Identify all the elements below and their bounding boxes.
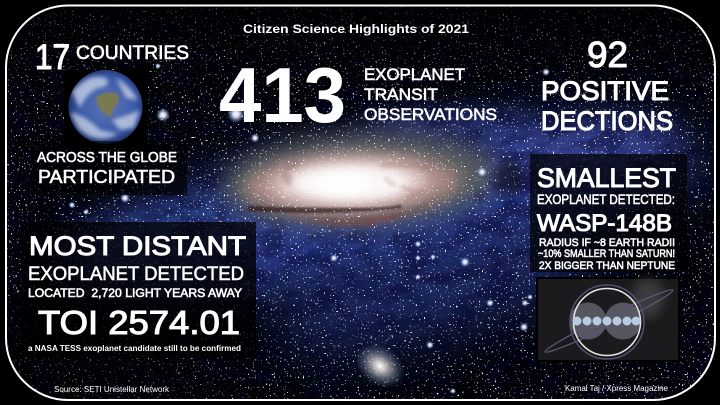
text block: size comparisons: ~10% SMALLER THAN SATURN! (538, 248, 675, 260)
name: TOI 2574.01: TOI 2574.01 (38, 304, 240, 341)
label: exoplanet transit observations: OBSERVATIONS (364, 105, 497, 124)
icon: planet size comparison with ring (536, 277, 680, 362)
panel: 413 observations (219, 51, 497, 139)
stat: 92: 92 (587, 34, 628, 75)
dust lane (248, 204, 402, 213)
subheading: exoplanet detected: EXOPLANET DETECTED (28, 263, 244, 285)
text block: size comparisons (538, 237, 675, 272)
author credit: Kamal Taj / Xpress Magazine (565, 384, 669, 393)
label: positive dections: DECTIONS (541, 106, 673, 136)
panel: smallest exoplanet (530, 154, 687, 362)
heading: smallest: SMALLEST (537, 163, 676, 193)
text block: size comparisons: 2X BIGGER THAN NEPTUNE (539, 260, 675, 272)
subheading: exoplanet detected: EXOPLANET DETECTED: (537, 191, 675, 207)
note: candidate status: a NASA TESS exoplanet candidate still to be confirmed (28, 344, 241, 353)
label: exoplanet transit observations: EXOPLANET (364, 65, 465, 84)
label: exoplanet transit observations: TRANSIT (364, 85, 438, 104)
panel: 92 positive detections (541, 34, 673, 136)
text block: size comparisons: RADIUS IF ~8 EARTH RADII (539, 237, 675, 249)
label: exoplanet transit observations (364, 65, 497, 124)
text block: distance: LOCATED 2,720 LIGHT YEARS AWAY (28, 286, 242, 300)
caption box: across the globe participated (31, 141, 187, 195)
caption box: across the globe participated: ACROSS THE GLOBE (37, 150, 177, 166)
label: positive dections (541, 76, 673, 136)
stat: 17: 17 (35, 38, 70, 77)
stat: 413: 413 (219, 51, 346, 139)
source credit: Source: SETI Unistellar Network (54, 385, 170, 394)
icon: Earth globe (64, 70, 148, 148)
label: countries: COUNTRIES (76, 43, 189, 64)
panel: 17 countries (31, 38, 189, 195)
name: WASP-148B: WASP-148B (537, 210, 672, 237)
panel: most distant exoplanet (21, 222, 256, 357)
caption box: across the globe participated: PARTICIPATED (38, 167, 175, 187)
label: positive dections: POSITIVE (541, 76, 669, 106)
title: Citizen Science Highlights of 2021 (243, 22, 469, 36)
heading: most distant: MOST DISTANT (29, 231, 246, 261)
